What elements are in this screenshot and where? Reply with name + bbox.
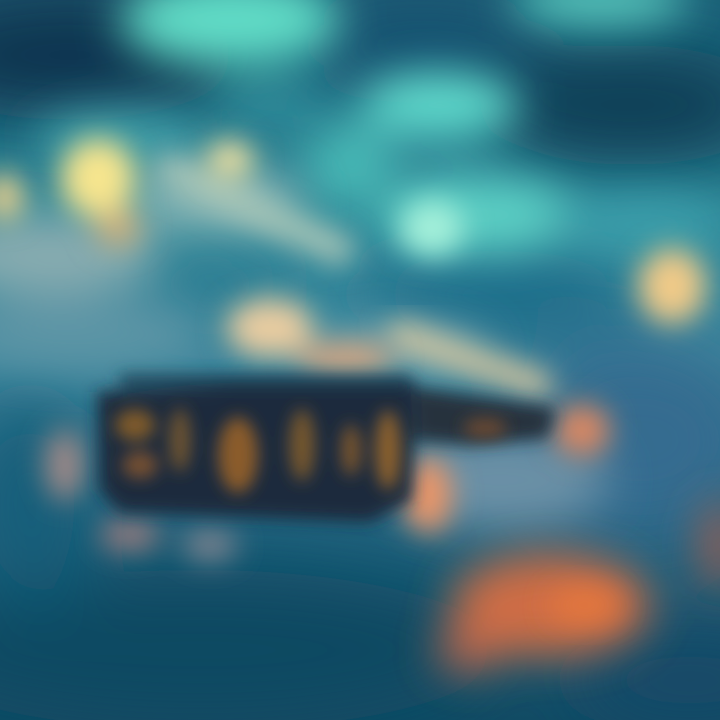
house body [97, 380, 415, 522]
warm light spots [0, 138, 706, 324]
roof line [120, 375, 410, 387]
orange hot core [549, 587, 621, 623]
house silhouette [97, 375, 555, 522]
glow above roof [226, 298, 395, 374]
roof extension [415, 388, 555, 445]
bright teal clouds [30, 0, 720, 255]
mint highlight [400, 200, 464, 256]
grey-blue cloud bank and mist [0, 170, 610, 530]
house windows [115, 408, 507, 493]
orange fire cloud [435, 500, 720, 672]
orange glows around house [45, 404, 610, 561]
diagonal light streak [170, 170, 340, 250]
diagonal roof-light streak [400, 335, 540, 385]
